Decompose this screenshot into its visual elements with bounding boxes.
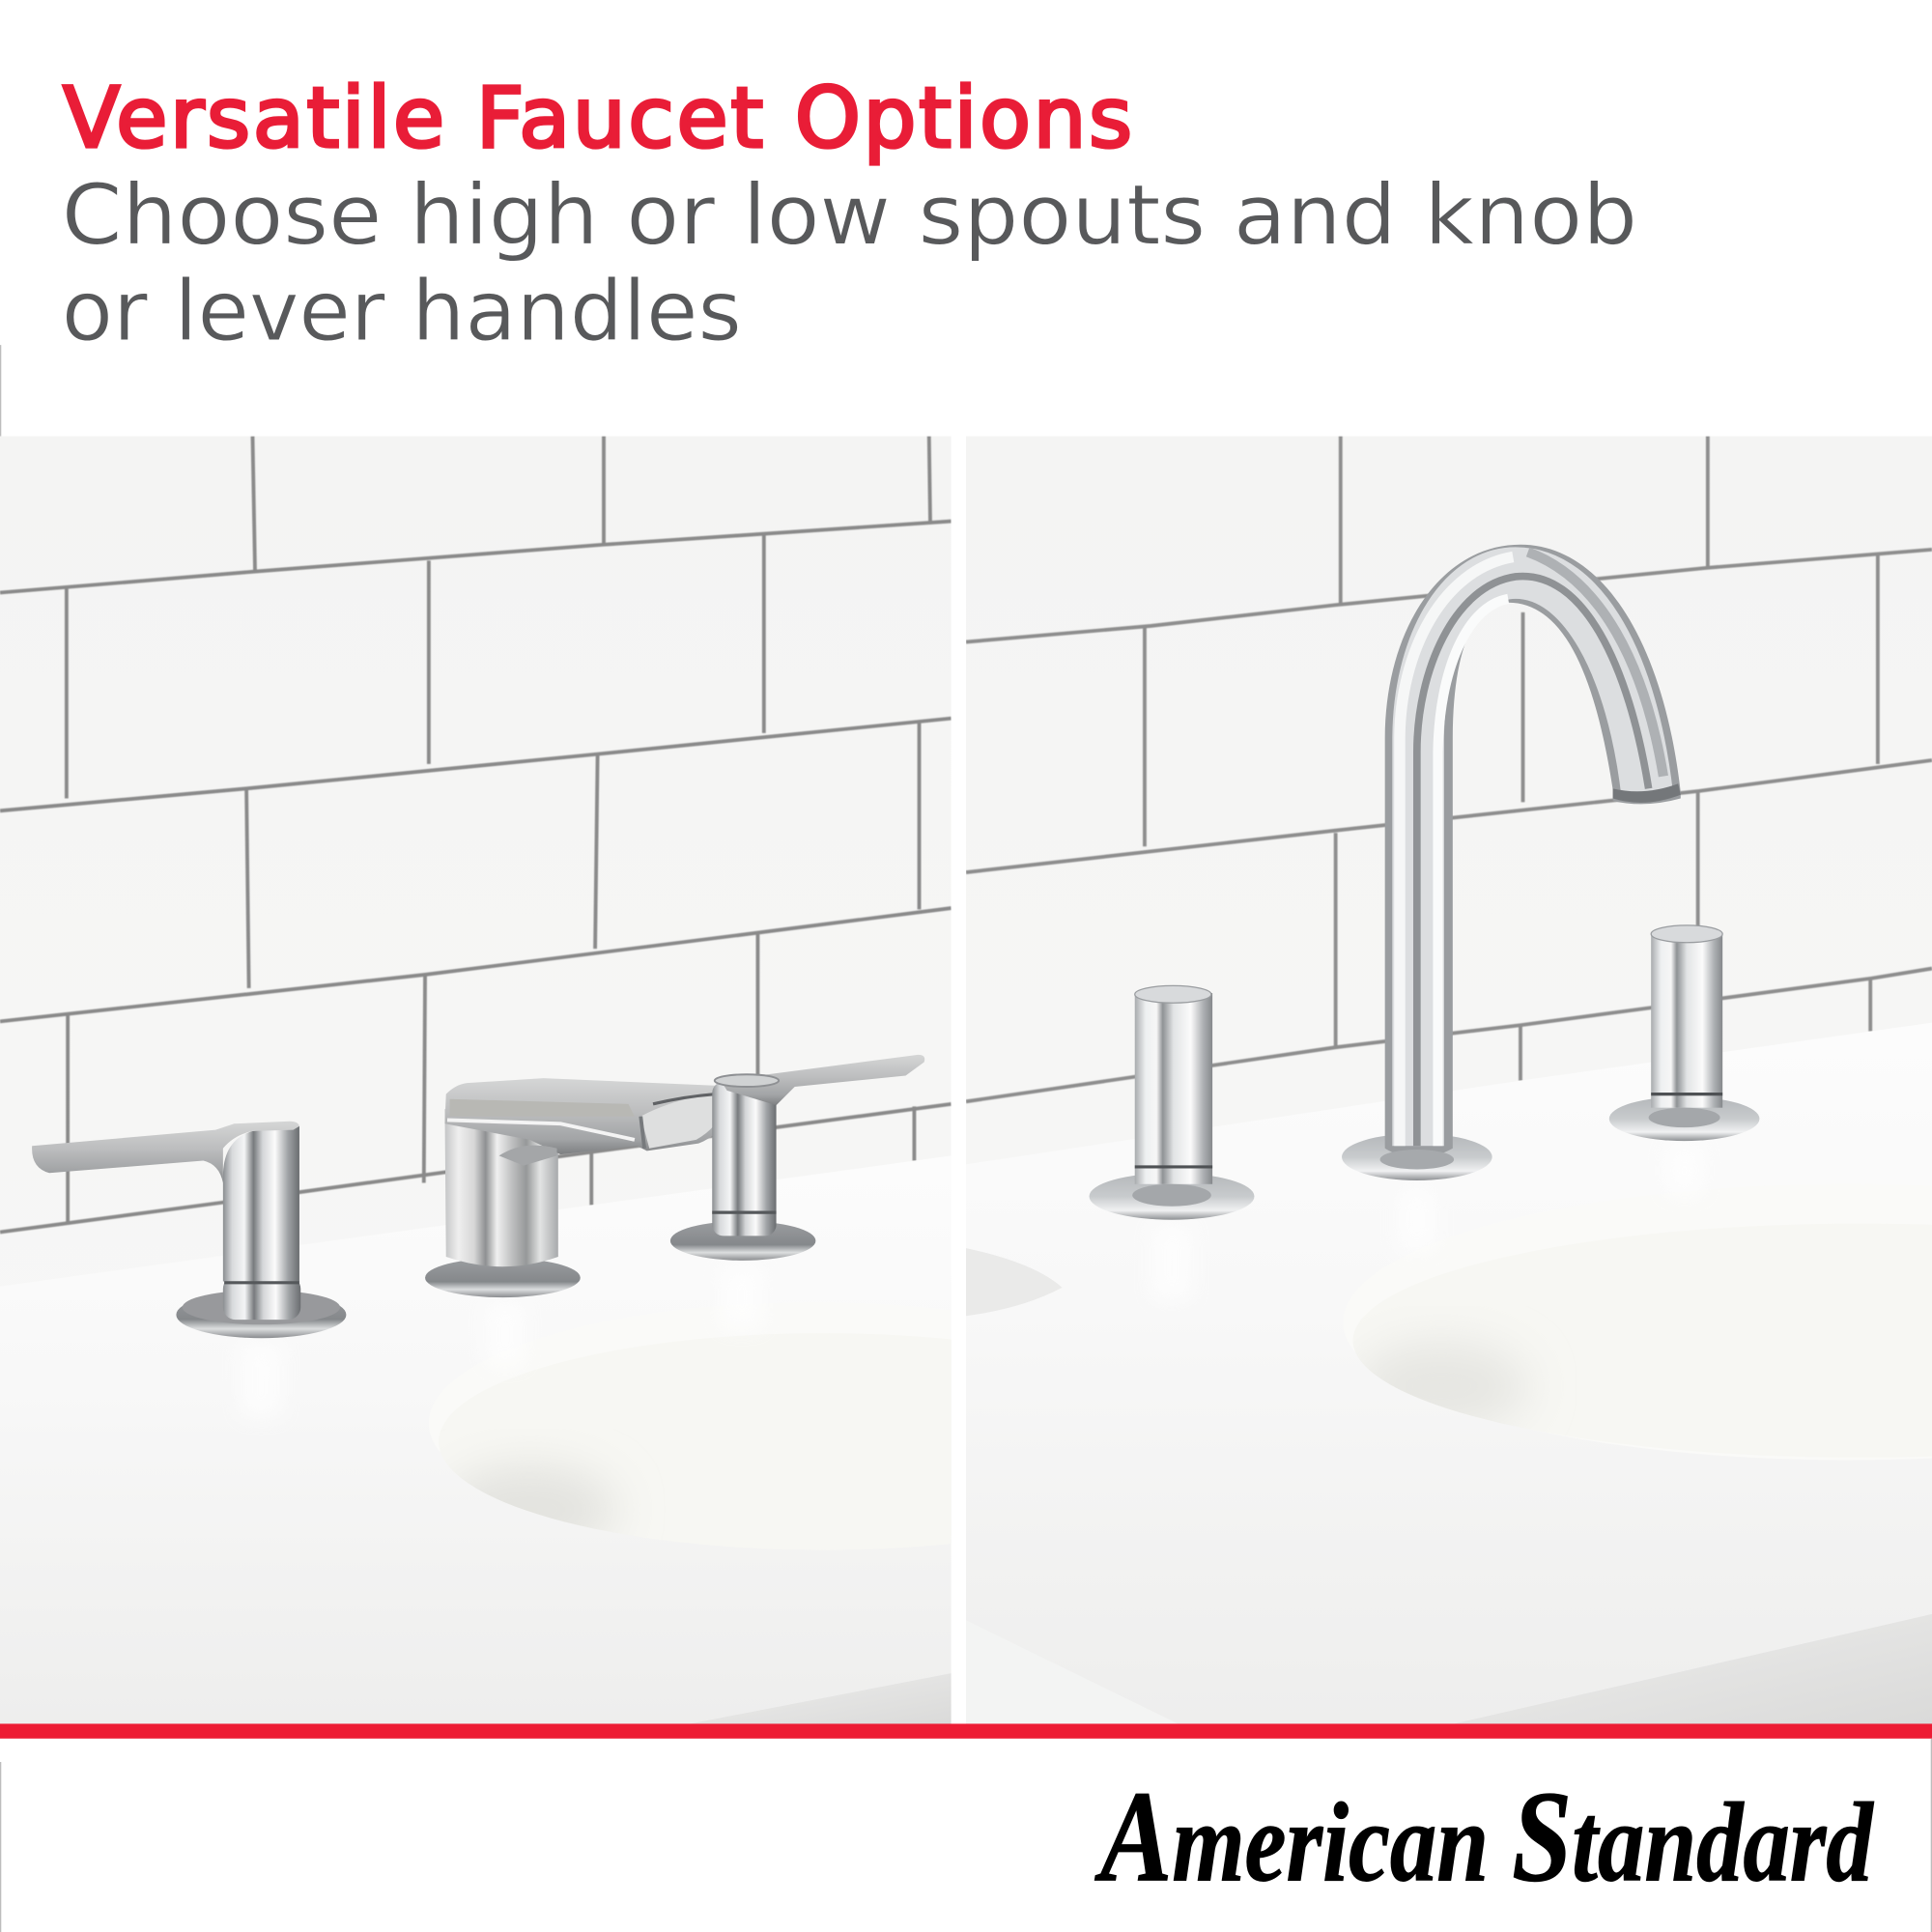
counter reflections — [241, 1266, 763, 1417]
countertop — [1033, 1031, 1873, 1723]
left knob — [1090, 985, 1254, 1220]
subtitle: or lever handles — [62, 263, 742, 360]
right lever handle — [670, 1055, 924, 1261]
high arc spout — [1342, 545, 1681, 1180]
low spout — [425, 1078, 734, 1297]
title: Versatile Faucet Options — [63, 70, 1132, 167]
sink basin — [458, 1453, 617, 1530]
red divider bar — [0, 1723, 1932, 1739]
sink basin — [1360, 1323, 1533, 1423]
subtitle: Choose high or low spouts and knob — [62, 167, 1637, 265]
right knob — [1609, 925, 1759, 1141]
counter shadow — [966, 1248, 1062, 1316]
tile grout lines — [0, 437, 952, 1233]
logo: American Standard: American Standard — [1094, 1765, 1875, 1909]
photo panel: low spout with lever handles — [0, 437, 952, 1723]
countertop — [0, 1155, 952, 1723]
tile grout lines — [966, 437, 1932, 1101]
photo panel: high spout with knob handles — [966, 437, 1932, 1723]
bottom shade — [1454, 1614, 1932, 1723]
left lever handle — [32, 1122, 346, 1338]
counter reflections — [1152, 1146, 1703, 1300]
pale wedge at lower left — [966, 1620, 1178, 1723]
bottom shade — [690, 1673, 952, 1723]
